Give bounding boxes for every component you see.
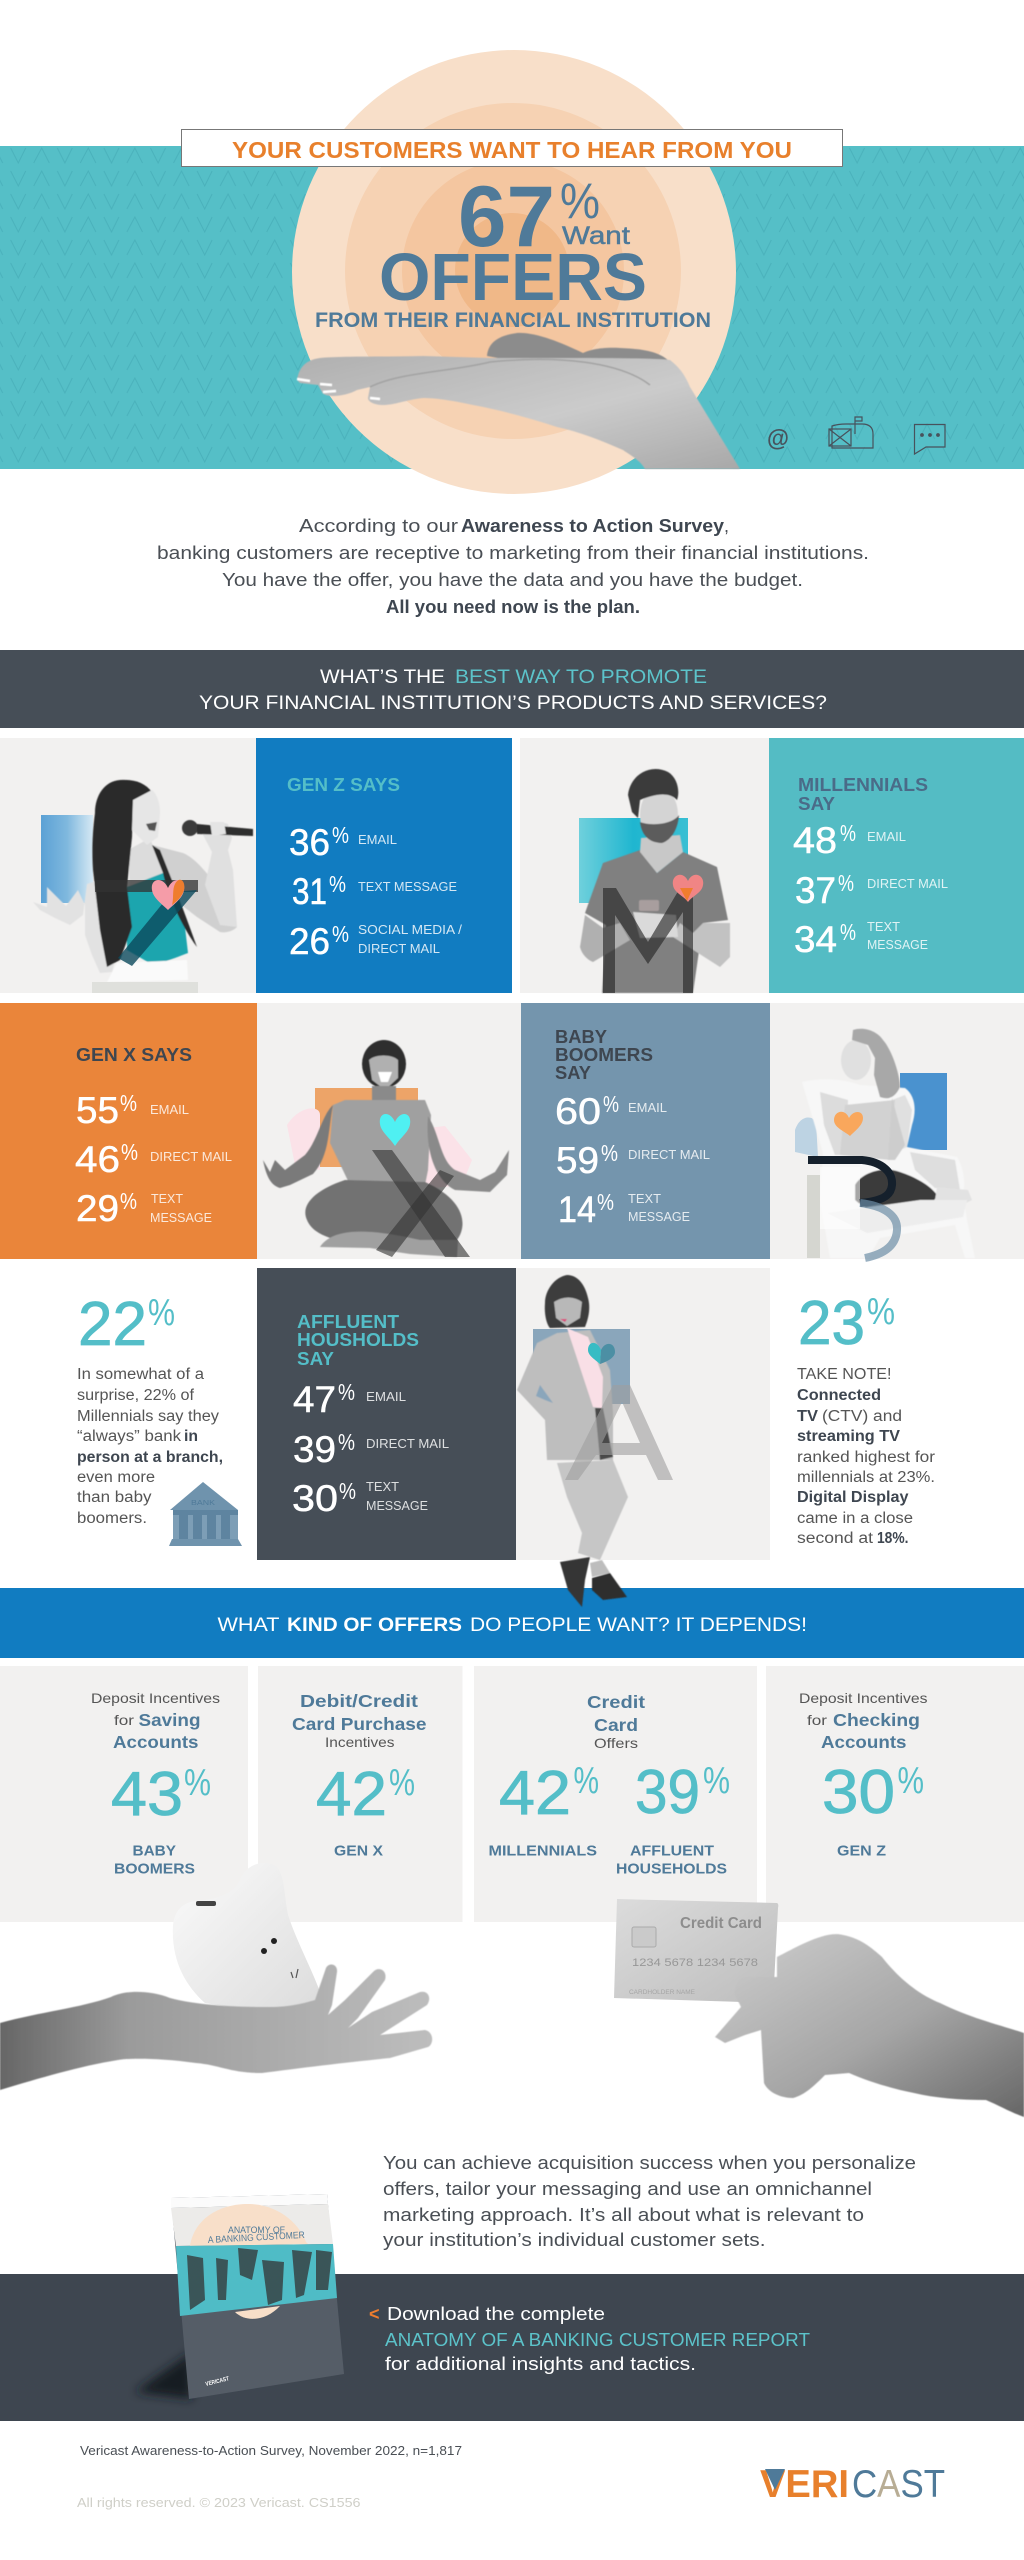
- panel: saving accounts offer: for: [114, 1712, 134, 1728]
- hero hand photo: [297, 333, 740, 469]
- stat: 29% text message: TEXT: [151, 1191, 183, 1206]
- stat: 46% direct mail: [75, 1139, 232, 1180]
- stat: 30% text message: 30: [292, 1478, 338, 1519]
- stat: 48% email: 48: [793, 820, 837, 861]
- closing paragraph: You can achieve acquisition success when you personalize: [383, 2153, 916, 2173]
- stat: 47% email: 47: [293, 1379, 336, 1420]
- panel: checking accounts offer: for: [807, 1712, 827, 1728]
- stat: 31% text message: [292, 871, 457, 912]
- section header: kind of offers: KIND OF OFFERS: [287, 1615, 462, 1636]
- stat: 29% text message: %: [120, 1188, 137, 1214]
- heading: affluent households say: [297, 1312, 419, 1369]
- logo: vericast: [760, 2463, 945, 2506]
- photo: credit card: [614, 1899, 778, 2003]
- panel: checking accounts offer: Accounts: [821, 1732, 907, 1752]
- stat: 39% direct mail: [293, 1429, 449, 1470]
- report cover mockup: ANATOMY OF: [228, 2225, 285, 2236]
- panel: card purchase offer: Card Purchase: [292, 1714, 427, 1734]
- stat: 31% text message: %: [329, 871, 346, 897]
- callout: 23% connected tv: second at: [797, 1530, 874, 1547]
- heading: millennials say: SAY: [798, 794, 835, 814]
- stat: 55% email: %: [120, 1090, 137, 1116]
- stat: 36% email: EMAIL: [358, 832, 397, 847]
- panel: card purchase offer: %: [389, 1762, 415, 1804]
- callout: 22% bank in person: surprise, 22% of: [77, 1387, 195, 1404]
- stat: 60% email: EMAIL: [628, 1100, 667, 1115]
- heading: millennials say: [798, 775, 928, 814]
- stat: 36% email: 36: [289, 822, 330, 863]
- photo: credit card: Credit Card: [680, 1915, 762, 1932]
- panel: saving accounts offer: [0, 1666, 248, 1922]
- section header: best way to promote: [0, 650, 1024, 728]
- panel: saving accounts offer: %: [184, 1762, 211, 1804]
- stat: 26% social media / direct mail: [289, 921, 462, 962]
- icon: bank building: [169, 1482, 242, 1546]
- photo: credit card: CARDHOLDER NAME: [629, 1990, 695, 1996]
- callout: 23% connected tv: %: [867, 1291, 895, 1333]
- panel: credit card offers: 42: [499, 1759, 571, 1828]
- panel: credit card offers: [474, 1666, 757, 1922]
- stat: 37% direct mail: %: [838, 870, 854, 896]
- title banner: [182, 130, 842, 166]
- heading: baby boomers say: BOOMERS: [555, 1045, 653, 1065]
- intro paragraph: All you need now is the plan.: [386, 597, 640, 617]
- heading: baby boomers say: SAY: [555, 1063, 591, 1083]
- callout: 22% bank in person: Millennials say they: [77, 1408, 219, 1425]
- intro paragraph: ,: [724, 516, 729, 536]
- panel: credit card offers: 39: [635, 1758, 700, 1827]
- stat: 48% email: %: [840, 820, 856, 846]
- panel: millennial stats: [769, 738, 1024, 993]
- closing paragraph: offers, tailor your messaging and use an omnichannel: [383, 2179, 872, 2199]
- icon: chat bubble: [914, 424, 945, 454]
- callout: 23% connected tv: streaming TV: [797, 1428, 901, 1445]
- panel: saving accounts offer: Deposit Incentives: [91, 1690, 220, 1706]
- report cover mockup: A BANKING CUSTOMER: [208, 2230, 305, 2246]
- download band: Download the complete: [387, 2304, 605, 2324]
- panel: gen z stats: [256, 738, 512, 993]
- panel: saving accounts offer: Saving: [138, 1710, 200, 1730]
- intro paragraph: According to our: [299, 516, 458, 536]
- panel: checking accounts offer: GEN Z: [837, 1842, 886, 1860]
- stat: 59% direct mail: DIRECT MAIL: [628, 1147, 710, 1162]
- stat: 55% email: 55: [76, 1090, 119, 1131]
- stat: 39% direct mail: DIRECT MAIL: [366, 1436, 449, 1451]
- heading: affluent households say: AFFLUENT: [297, 1312, 399, 1332]
- heading: millennials say: MILLENNIALS: [798, 775, 928, 795]
- intro paragraph: [157, 516, 869, 617]
- intro paragraph: You have the offer, you have the data and you have the budget.: [222, 570, 803, 590]
- closing paragraph: your institution’s individual customer sets.: [383, 2230, 766, 2250]
- report cover mockup: VERICAST: [205, 2376, 230, 2388]
- callout: 23% connected tv: (CTV) and: [822, 1408, 902, 1425]
- callout: 22% bank in person: person at a branch,: [77, 1449, 223, 1466]
- stat: 26% social media / direct mail: %: [332, 921, 349, 947]
- heading: baby boomers say: [555, 1027, 653, 1083]
- stat: 59% direct mail: [556, 1140, 710, 1181]
- panel: card purchase offer: GEN X: [334, 1842, 383, 1860]
- footnote: survey source: Vericast Awareness-to-Action Survey, November 2022, n=1,817: [80, 2443, 462, 2458]
- panel: affluent households stats: [257, 1268, 516, 1560]
- hero: teal patterned band: [0, 146, 1024, 469]
- photo: piggy bank: [173, 1863, 322, 2010]
- section header: best way to promote: BEST WAY TO PROMOTE: [455, 667, 707, 688]
- report cover mockup: [135, 2194, 344, 2399]
- stat: 39% direct mail: 39: [293, 1429, 336, 1470]
- logo: vericast: VERI: [760, 2463, 849, 2506]
- footnote: copyright: All rights reserved. © 2023 Vericast. CS1556: [77, 2495, 360, 2510]
- stat: 30% text message: [292, 1478, 428, 1519]
- heading: baby boomers say: BABY: [555, 1027, 607, 1047]
- icon: mailbox: [829, 417, 873, 448]
- stat: 30% text message: TEXT: [366, 1479, 399, 1494]
- stat: 14% text message: MESSAGE: [628, 1209, 690, 1224]
- panel: card purchase offer: [258, 1666, 462, 1922]
- stat: 26% social media / direct mail: SOCIAL MEDIA /: [358, 922, 462, 937]
- panel: credit card offers: Offers: [594, 1735, 638, 1751]
- stat: 46% direct mail: 46: [75, 1139, 120, 1180]
- stat: 37% direct mail: [795, 870, 948, 911]
- callout: 22% bank in person: “always” bank: [77, 1428, 181, 1445]
- title banner: YOUR CUSTOMERS WANT TO HEAR FROM YOU: [232, 137, 792, 163]
- stat: 60% email: [555, 1091, 667, 1132]
- logo: vericast: CAST: [852, 2463, 945, 2506]
- section header: kind of offers: [0, 1588, 1024, 1658]
- panel: credit card offers: %: [574, 1760, 599, 1802]
- panel: affluent photo backdrop: [516, 1268, 770, 1560]
- headline: 67% want offers: [315, 169, 711, 332]
- intro paragraph: Awareness to Action Survey: [461, 516, 724, 536]
- stat: 59% direct mail: %: [601, 1140, 618, 1166]
- callout: 23% connected tv: [797, 1289, 935, 1547]
- stat: 29% text message: 29: [76, 1188, 119, 1229]
- section header: best way to promote: WHAT’S THE: [320, 667, 445, 688]
- callout: 23% connected tv: Connected: [797, 1387, 881, 1404]
- panel: credit card offers: HOUSEHOLDS: [616, 1860, 727, 1878]
- photo: hand holding credit card: [715, 1934, 1024, 2117]
- icon: bank building: BANK: [191, 1500, 215, 1507]
- hero: concentric peach circles: [292, 50, 736, 494]
- download band: ANATOMY OF A BANKING CUSTOMER REPORT: [385, 2330, 810, 2350]
- panel: millennial photo: [520, 738, 769, 993]
- heading: affluent households say: HOUSHOLDS: [297, 1330, 419, 1350]
- callout: 22% bank in person: in: [184, 1428, 198, 1445]
- section header: kind of offers: WHAT: [218, 1615, 280, 1636]
- stat: 29% text message: [76, 1188, 212, 1229]
- panel: card purchase offer: 42: [316, 1760, 387, 1829]
- stat: 34% text message: %: [840, 919, 856, 945]
- stat: 30% text message: %: [339, 1478, 356, 1504]
- stat: 46% direct mail: %: [121, 1139, 138, 1165]
- closing paragraph: marketing approach. It’s all about what is relevant to: [383, 2205, 864, 2225]
- stat: 34% text message: [794, 919, 928, 960]
- stat: 34% text message: TEXT: [867, 919, 900, 934]
- panel: checking accounts offer: [766, 1666, 1024, 1922]
- callout: 22% bank in person: than baby: [77, 1489, 152, 1506]
- panel: credit card offers: AFFLUENT: [630, 1842, 714, 1860]
- callout: 23% connected tv: 23: [798, 1289, 865, 1358]
- stat: 55% email: EMAIL: [150, 1102, 189, 1117]
- stat: 60% email: %: [603, 1091, 619, 1117]
- panel: card purchase offer: Debit/Credit: [300, 1691, 418, 1711]
- panel: gen x photo: [257, 1003, 521, 1259]
- callout: 23% connected tv: TAKE NOTE!: [797, 1366, 892, 1383]
- callout: 23% connected tv: ranked highest for: [797, 1449, 935, 1466]
- panel: credit card offers: Credit: [587, 1692, 645, 1712]
- panel: baby boomer stats: [521, 1003, 770, 1259]
- panel: credit card offers: %: [703, 1760, 730, 1802]
- panel: saving accounts offer: 43: [111, 1760, 183, 1829]
- panel: credit card offers: Card: [594, 1715, 638, 1735]
- stat: 37% direct mail: 37: [795, 870, 836, 911]
- stat: 48% email: EMAIL: [867, 829, 906, 844]
- stat: 29% text message: MESSAGE: [150, 1210, 212, 1225]
- stat: 14% text message: 14: [558, 1189, 596, 1230]
- callout: 22% bank in person: even more: [77, 1469, 155, 1486]
- callout: 22% bank in person: %: [148, 1292, 175, 1334]
- callout: 23% connected tv: Digital Display: [797, 1489, 909, 1506]
- section header: best way to promote: YOUR FINANCIAL INSTITUTION’S PRODUCTS AND SERVICES?: [199, 693, 827, 714]
- panel: checking accounts offer: %: [898, 1760, 924, 1802]
- stat: 55% email: [76, 1090, 189, 1131]
- callout: 23% connected tv: came in a close: [797, 1510, 913, 1527]
- panel: gen z photo: [0, 738, 256, 993]
- stat: 39% direct mail: %: [338, 1429, 355, 1455]
- heading: gen x says: GEN X SAYS: [76, 1045, 192, 1065]
- intro paragraph: banking customers are receptive to marketing from their financial institutions.: [157, 543, 869, 563]
- photo: hand holding piggy bank: [0, 1965, 432, 2090]
- stat: 30% text message: MESSAGE: [366, 1498, 428, 1513]
- stat: 60% email: 60: [555, 1091, 601, 1132]
- stat: 36% email: %: [332, 822, 349, 848]
- stat: 48% email: [793, 820, 906, 861]
- panel: baby boomer photo: [770, 1003, 1024, 1259]
- panel: saving accounts offer: BOOMERS: [114, 1860, 195, 1878]
- callout: 23% connected tv: TV: [797, 1408, 819, 1425]
- headline: 67% want offers: %: [560, 173, 600, 229]
- photo: businesswoman: [517, 1275, 673, 1607]
- panel: checking accounts offer: Checking: [833, 1710, 920, 1730]
- stat: 14% text message: [558, 1189, 690, 1230]
- headline: 67% want offers: OFFERS: [379, 240, 647, 315]
- heading: gen z says: GEN Z SAYS: [287, 775, 400, 795]
- photo: credit card: 1234 5678 1234 5678: [632, 1957, 758, 1969]
- section header: kind of offers: DO PEOPLE WANT? IT DEPENDS!: [470, 1615, 807, 1636]
- icon: at sign: @: [767, 425, 789, 451]
- panel: saving accounts offer: BABY: [132, 1842, 176, 1860]
- stat: 34% text message: 34: [794, 919, 837, 960]
- stat: 14% text message: TEXT: [628, 1191, 661, 1206]
- stat: 34% text message: MESSAGE: [867, 937, 928, 952]
- callout: 22% bank in person: boomers.: [77, 1510, 147, 1527]
- stat: 46% direct mail: DIRECT MAIL: [150, 1149, 232, 1164]
- heading: affluent households say: SAY: [297, 1349, 334, 1369]
- closing paragraph: [383, 2153, 916, 2250]
- stat: 26% social media / direct mail: 26: [289, 921, 330, 962]
- stat: 31% text message: 31: [292, 871, 327, 912]
- download band: [0, 2274, 1024, 2421]
- panel: credit card offers: MILLENNIALS: [488, 1842, 597, 1860]
- callout: 22% bank in person: In somewhat of a: [77, 1366, 204, 1383]
- stat: 47% email: EMAIL: [366, 1389, 406, 1404]
- panel: card purchase offer: Incentives: [325, 1734, 394, 1750]
- headline: 67% want offers: FROM THEIR FINANCIAL INSTITUTION: [315, 308, 711, 332]
- stat: 37% direct mail: DIRECT MAIL: [867, 876, 948, 891]
- headline: 67% want offers: Want: [562, 222, 630, 250]
- stat: 26% social media / direct mail: DIRECT MAIL: [358, 941, 440, 956]
- stat: 36% email: [289, 822, 397, 863]
- stat: 59% direct mail: 59: [556, 1140, 599, 1181]
- callout: 23% connected tv: 18%.: [877, 1530, 908, 1547]
- stat: 31% text message: TEXT MESSAGE: [358, 879, 457, 894]
- callout: 23% connected tv: millennials at 23%.: [797, 1469, 935, 1486]
- panel: checking accounts offer: 30: [822, 1758, 895, 1827]
- callout: 22% bank in person: 22: [78, 1290, 147, 1359]
- panel: checking accounts offer: Deposit Incentives: [799, 1690, 928, 1706]
- callout: 22% bank in person: [77, 1290, 223, 1527]
- stat: 47% email: [293, 1379, 406, 1420]
- panel: saving accounts offer: Accounts: [113, 1732, 199, 1752]
- headline: 67% want offers: 67: [458, 169, 555, 265]
- panel: gen x stats: [0, 1003, 257, 1259]
- download band: <: [369, 2304, 380, 2324]
- stat: 14% text message: %: [597, 1189, 614, 1215]
- stat: 47% email: %: [338, 1379, 355, 1405]
- download band: for additional insights and tactics.: [385, 2354, 696, 2374]
